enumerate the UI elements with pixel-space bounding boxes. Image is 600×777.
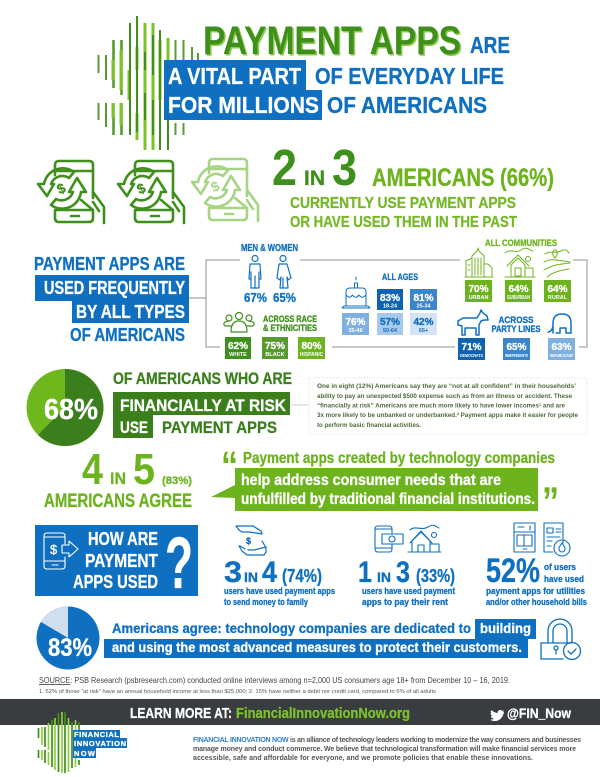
stat: 2 in 3 americans: OR HAVE USED THEM IN THE PAST xyxy=(290,214,517,231)
stat: white xyxy=(225,337,251,359)
footer bar: LEARN MORE AT: xyxy=(130,705,232,722)
group: all ages xyxy=(342,272,437,335)
group: party lines: PARTY LINES xyxy=(492,324,540,335)
stat: black: BLACK xyxy=(265,352,285,358)
statement: technology companies protect customers xyxy=(104,619,536,658)
stat: 4 in 5 americans agree: (83%) xyxy=(162,475,192,487)
stat: ages 25-34: 25-34 xyxy=(416,304,431,310)
group: men and women: 67% xyxy=(244,290,267,305)
icon: phone 2 xyxy=(118,161,184,223)
stat: pay rent: (33%) xyxy=(416,566,455,586)
icon: phone sending money xyxy=(44,533,78,569)
stat: democrats: DEMOCRATS xyxy=(460,353,483,358)
stat: 4 in 5 americans agree xyxy=(44,445,192,512)
icon: rural xyxy=(544,250,570,277)
stat: ages 25-34: 81% xyxy=(413,293,434,304)
stat: republicans: 63% xyxy=(551,342,572,353)
text: $ xyxy=(134,179,148,197)
stat: rural: RURAL xyxy=(548,295,568,301)
stat: suburban: SUBURBAN xyxy=(507,295,530,301)
stat: send money to family: IN xyxy=(244,569,258,585)
group: all communities: ALL COMMUNITIES xyxy=(485,238,557,249)
connector brackets xyxy=(189,260,587,347)
title xyxy=(164,19,510,120)
stat: send money to family: 4 xyxy=(262,556,277,589)
icon: hands with dollar xyxy=(236,526,266,555)
stat: 2 in 3 americans: 2 xyxy=(272,139,297,196)
group: men and women: 65% xyxy=(273,290,296,305)
title line: payment apps: ARE xyxy=(470,32,510,58)
stat: ages 18-24 xyxy=(377,289,403,310)
footer bar xyxy=(0,699,600,725)
stat: send money to family: to send money to family xyxy=(224,597,308,607)
stat: pay rent: apps to pay their rent xyxy=(362,597,448,607)
note: financially at risk explanation: One in eight (12%) Americans say they are “not at all confident” in their households’ xyxy=(317,383,576,390)
stat: pay rent: 1 xyxy=(358,556,372,589)
group: party lines: ACROSS xyxy=(498,315,534,326)
stat: 2 in 3 americans: IN xyxy=(304,167,325,190)
pie chart: 68 percent: 68% xyxy=(44,394,98,426)
heading: used frequently: USED FREQUENTLY xyxy=(44,278,185,298)
heading: used frequently: PAYMENT APPS ARE xyxy=(34,254,185,274)
heading: financially at risk: USE xyxy=(120,418,148,437)
icon: phone and bill xyxy=(375,526,403,552)
stat: pay rent: IN xyxy=(377,569,391,585)
group: race and ethnicities xyxy=(224,312,325,359)
pie chart: 83 percent xyxy=(36,606,100,670)
quote bubble xyxy=(211,468,538,511)
stat: independents xyxy=(503,338,530,360)
stat: ages 65+: 42% xyxy=(413,317,434,328)
heading: used frequently: OF AMERICANS xyxy=(70,325,185,345)
logo wordmark: INNOVATION xyxy=(74,739,126,748)
stat: urban: 70% xyxy=(468,284,489,295)
stat: 2 in 3 americans: 3 xyxy=(332,139,357,196)
logo wordmark xyxy=(73,730,127,758)
pie chart: 83 percent: 83% xyxy=(48,634,92,662)
stat: hispanic: 80% xyxy=(301,341,322,352)
icon: elephant xyxy=(548,314,571,333)
stat: rural: 64% xyxy=(547,284,568,295)
icon: donkey xyxy=(458,310,488,335)
note: financially at risk explanation xyxy=(292,378,587,434)
stat: hispanic: HISPANIC xyxy=(300,352,324,358)
stat: democrats: 71% xyxy=(461,342,482,353)
stat: utilities and bills: 52% xyxy=(486,552,540,590)
heading: used frequently xyxy=(34,254,189,345)
icon: padlock xyxy=(541,619,580,660)
text: $ xyxy=(208,177,222,195)
stat: send money to family: 3 xyxy=(224,556,242,589)
icon: phone 3 xyxy=(192,159,258,221)
group: race and ethnicities: & ETHNICITIES xyxy=(263,323,317,334)
footer bar: FinancialInnovationNow.org xyxy=(236,705,410,722)
stat: pay rent xyxy=(358,525,455,607)
about text: accessible, safe and affordable for everyone, and we promote policies that enable these innovations. xyxy=(193,755,533,762)
title highlight boxes xyxy=(164,60,322,120)
quote: technology companies: unfulfilled by traditional financial institutions. xyxy=(241,491,535,508)
title line: vital part: OF EVERYDAY LIFE xyxy=(315,63,504,89)
stat: ages 35-49: 76% xyxy=(345,317,366,328)
icon: bird xyxy=(490,710,504,721)
heading: financially at risk: FINANCIALLY AT RISK xyxy=(120,396,287,415)
icon: phone 1 xyxy=(38,161,104,223)
stat: utilities and bills xyxy=(486,523,587,607)
title line: millions: FOR MILLIONS xyxy=(168,92,319,118)
stat: 2 in 3 americans: CURRENTLY USE PAYMENT APPS xyxy=(290,195,516,212)
stat: ages 50-64: 50-64 xyxy=(383,328,398,334)
title line: millions: OF AMERICANS xyxy=(327,92,487,118)
group: all communities xyxy=(465,238,571,302)
title line: payment apps: PAYMENT APPS xyxy=(203,19,461,63)
stat: 4 in 5 americans agree: 5 xyxy=(133,445,155,494)
pie chart: 68 percent xyxy=(26,369,104,446)
stat: utilities and bills: payment apps for utilities xyxy=(486,586,585,596)
statement: technology companies protect customers: and using the most advanced measures to protect their customers. xyxy=(112,639,522,655)
stat: send money to family: users have used payment apps xyxy=(224,586,335,596)
stat: hispanic xyxy=(298,337,325,359)
heading: financially at risk: PAYMENT APPS xyxy=(162,418,277,437)
stat: independents: INDEPENDENTS xyxy=(505,353,528,358)
quote: technology companies: “ xyxy=(221,444,238,488)
quote: technology companies: Payment apps created by technology companies xyxy=(243,450,555,467)
logo wordmark: FINANCIAL xyxy=(74,730,119,739)
stat: pay rent: 3 xyxy=(396,556,410,589)
title line: millions xyxy=(168,92,487,118)
stat: republicans: REPUBLICANS xyxy=(550,353,573,358)
about text: manage money and conduct commerce. We believe that technological transformation will make financial services more xyxy=(193,746,576,753)
stat: ages 35-49: 35-49 xyxy=(348,328,363,334)
text: $ xyxy=(54,179,68,197)
note: financially at risk explanation: ability to pay an unexpected $500 expense such as from an illness or accident. These xyxy=(317,393,572,400)
group: party lines xyxy=(458,310,575,360)
panel: how are payment apps used: APPS USED xyxy=(73,572,158,592)
statement: technology companies protect customers: building xyxy=(480,620,531,636)
footer bar: @FIN_Now xyxy=(507,705,571,721)
stat: 2 in 3 americans xyxy=(272,139,554,231)
heading: used frequently: BY ALL TYPES xyxy=(76,302,185,322)
about text xyxy=(193,737,581,762)
group: men and women: MEN & WOMEN xyxy=(241,243,298,254)
stat: ages 65+ xyxy=(410,313,437,335)
stat: utilities and bills: of users xyxy=(544,562,576,573)
icons: phones with money transfer xyxy=(38,159,258,223)
stat: suburban xyxy=(505,280,532,302)
source note: 1. 52% of those “at risk” have an annual household income at less than $25,000; 2. 15% have neither a debit nor credit card, compared to 6% of all adults xyxy=(39,689,436,695)
stat: democrats xyxy=(458,338,485,360)
stat: ages 65+: 65+ xyxy=(419,328,428,334)
icon: rent house xyxy=(408,525,441,552)
icon: receipt and water drop xyxy=(544,523,570,556)
stat: white: WHITE xyxy=(229,352,247,358)
panel: how are payment apps used: $ xyxy=(50,542,58,557)
heading: financially at risk: OF AMERICANS WHO ARE xyxy=(113,369,292,388)
stat: black: 75% xyxy=(265,341,285,352)
stat: 4 in 5 americans agree: 4 xyxy=(82,445,103,494)
heading: financially at risk xyxy=(113,369,292,438)
icon: utility meter xyxy=(514,523,535,552)
panel: how are payment apps used: PAYMENT xyxy=(85,551,158,571)
stat: urban xyxy=(465,280,492,302)
logo stripes xyxy=(38,712,79,773)
stat: independents: 65% xyxy=(506,342,527,353)
logo: striped dollar sign xyxy=(98,16,198,150)
stat: ages 50-64: 57% xyxy=(380,317,400,328)
source note: SOURCE: PSB Research (psbresearch.com) conducted online interviews among n=2,000 US consumers age 18+ from December 10 – 16, 2019. xyxy=(39,675,510,685)
group: men and women xyxy=(241,243,298,305)
stat: ages 50-64 xyxy=(377,313,403,335)
title line: payment apps: PAYMENT APPS xyxy=(204,20,462,64)
stat: 2 in 3 americans: AMERICANS (66%) xyxy=(372,164,554,192)
quote: technology companies xyxy=(211,444,559,524)
icon: people xyxy=(224,312,254,332)
quote: technology companies: ” xyxy=(542,480,559,524)
panel: how are payment apps used: ? xyxy=(165,523,193,604)
stat: rural xyxy=(544,280,571,302)
about text: FINANCIAL INNOVATION NOW is an alliance of technology leaders working to modernize the way consumers and businesses xyxy=(193,737,581,744)
icon: cake xyxy=(342,277,370,308)
stat: send money to family xyxy=(224,526,335,607)
group: all ages: ALL AGES xyxy=(382,272,418,283)
logo wordmark: NOW xyxy=(74,749,96,758)
footer logo xyxy=(38,712,127,773)
quote: technology companies: help address consumer needs that are xyxy=(241,472,501,489)
stat: ages 25-34 xyxy=(410,289,437,310)
note: financially at risk explanation: “financially at risk” Americans are much more likely to have lower incomes¹ and are xyxy=(317,402,565,410)
stat: ages 18-24: 83% xyxy=(380,293,400,304)
stat: ages 18-24: 18-24 xyxy=(383,304,398,310)
stat: utilities and bills: have used xyxy=(544,574,584,585)
panel: how are payment apps used: HOW ARE xyxy=(88,529,158,549)
stat: suburban: 64% xyxy=(508,284,529,295)
icon: suburb house xyxy=(505,248,535,277)
title line: vital part xyxy=(168,63,504,89)
stat: pay rent: users have used payment xyxy=(362,586,455,596)
icon: city xyxy=(465,248,493,277)
panel: how are payment apps used xyxy=(35,523,198,604)
note: financially at risk explanation: to perform basic financial activities. xyxy=(317,422,421,429)
title line: vital part: A VITAL PART xyxy=(168,63,301,89)
group: race and ethnicities: ACROSS RACE xyxy=(263,314,317,325)
icon: man xyxy=(249,256,261,288)
note: financially at risk explanation: 3x more likely to be unbanked or underbanked.² Payment apps make it easier for people xyxy=(317,412,578,419)
stat: 4 in 5 americans agree: AMERICANS AGREE xyxy=(44,491,192,512)
stat: white: 62% xyxy=(228,341,248,352)
stat: urban: URBAN xyxy=(469,295,488,301)
stat: black xyxy=(262,337,288,359)
stat: send money to family: $ xyxy=(246,536,251,546)
statement: technology companies protect customers: Americans agree: technology companies are dedicated to xyxy=(112,620,471,636)
icon: woman xyxy=(277,256,291,288)
stat: send money to family: (74%) xyxy=(282,566,322,586)
source note xyxy=(39,675,510,695)
stat: republicans xyxy=(548,338,575,360)
stat: ages 35-49 xyxy=(342,313,369,335)
stat: 4 in 5 americans agree: IN xyxy=(110,469,126,488)
